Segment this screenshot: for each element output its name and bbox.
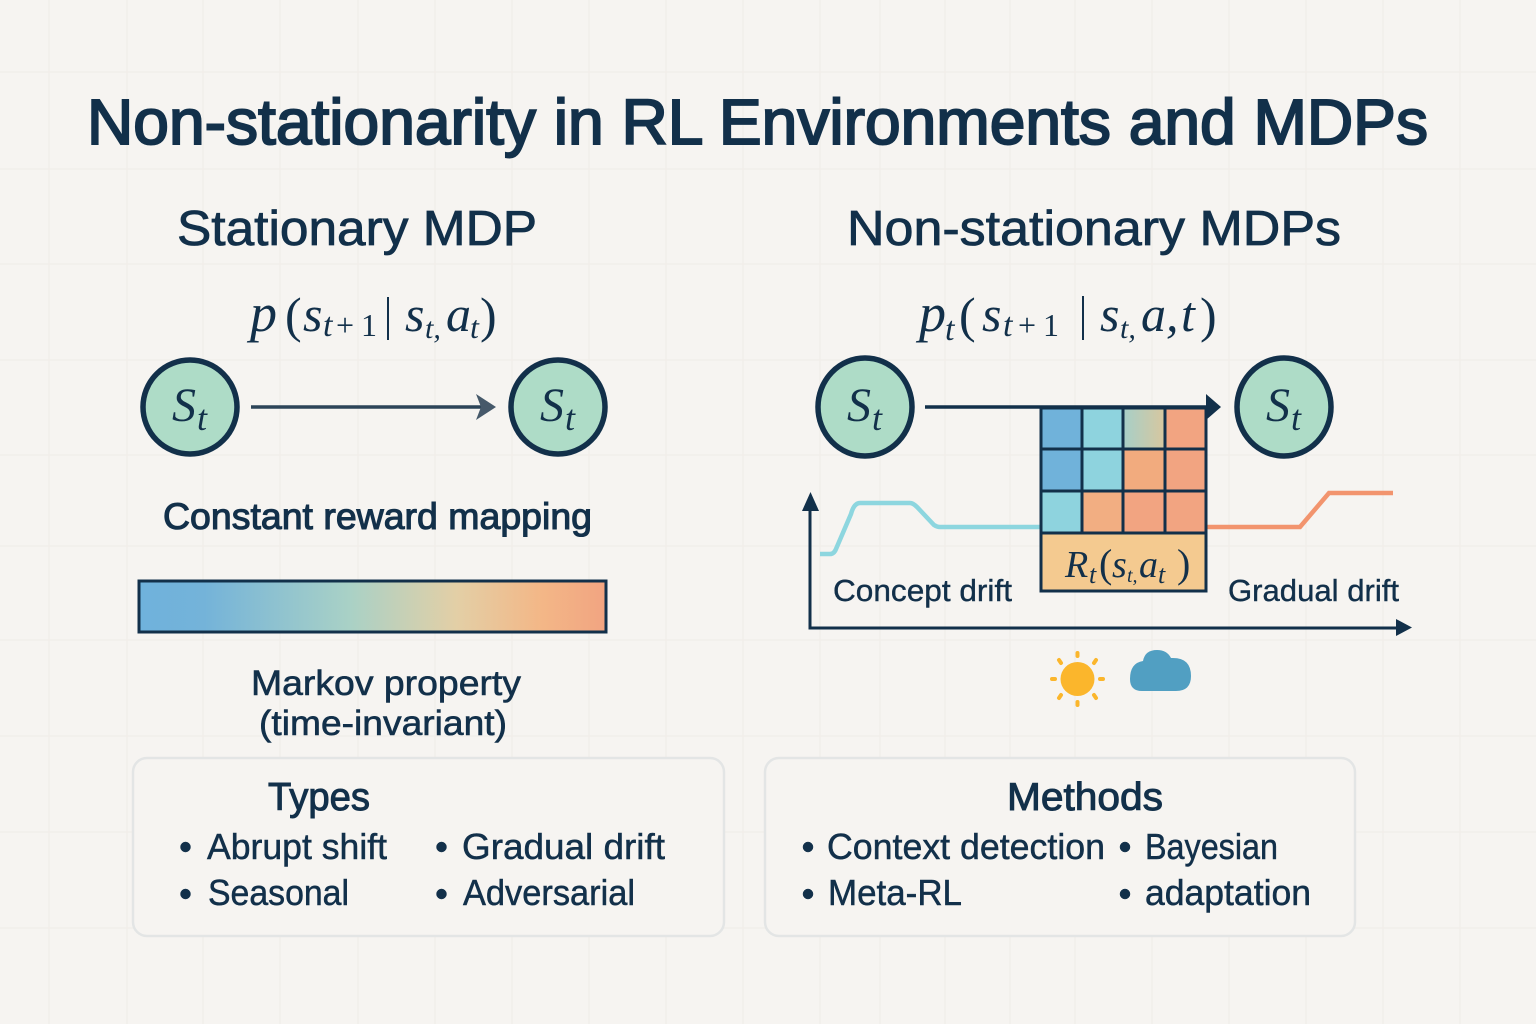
formula: reward function: t [1158, 560, 1166, 589]
list: types: Adversarial [463, 872, 635, 913]
label: gradual drift: Gradual drift [1228, 573, 1399, 608]
formula: reward function: t [1089, 560, 1097, 589]
heading: stationary MDP: Stationary MDP [177, 202, 537, 256]
formula: non-stationary transition: 1 [1043, 307, 1059, 343]
label: Markov property: (time-invariant) [259, 704, 507, 743]
heading: methods: Methods [1007, 776, 1163, 819]
list: types [180, 826, 665, 913]
state node: right: t [1291, 398, 1302, 438]
formula: stationary transition: t [470, 309, 480, 345]
state node: left: S [172, 379, 196, 432]
formula: non-stationary transition: ( [959, 287, 976, 343]
formula: reward function: ) [1177, 541, 1190, 586]
reward heatmap grid [1041, 408, 1206, 591]
gradient bar [139, 581, 606, 632]
icon: cloud [1130, 650, 1191, 691]
panel: non-stationary MDPs [802, 202, 1412, 705]
formula: reward function: R [1064, 544, 1088, 586]
formula: non-stationary transition: t [945, 311, 956, 348]
formula: stationary transition: t, [425, 312, 441, 345]
list: methods: Bayesian [1145, 826, 1278, 867]
icon: sun [1052, 653, 1103, 705]
list: methods: Meta-RL [828, 872, 962, 913]
label: Markov property: Markov property [251, 664, 522, 703]
formula: stationary transition: 1 [361, 307, 377, 343]
list: types: Gradual drift [462, 826, 665, 867]
formula: non-stationary transition: a, [1141, 286, 1178, 342]
formula: non-stationary transition: s [982, 286, 1001, 342]
title: Non-stationarity in RL Environments and MDPs [87, 86, 1428, 158]
formula: stationary transition: t [323, 307, 334, 344]
label: constant reward mapping: Constant reward mapping [163, 496, 592, 537]
formula: non-stationary transition: t, [1120, 312, 1136, 345]
state node: left [818, 358, 912, 456]
state node: left: t [197, 398, 208, 438]
formula: stationary transition [246, 283, 497, 345]
state node: left: S [847, 379, 871, 432]
heading: types: Types [268, 776, 370, 819]
arrow: stationary transition [251, 394, 496, 420]
gradual drift line [1206, 493, 1393, 527]
list: types: Abrupt shift [207, 826, 387, 867]
list: methods [803, 826, 1311, 913]
formula: stationary transition: a [446, 286, 471, 342]
panel: types [133, 758, 724, 936]
formula: non-stationary transition: p [915, 283, 946, 343]
formula: reward function: s [1112, 544, 1127, 586]
formula: non-stationary transition: t [1181, 286, 1196, 342]
heading: non-stationary MDPs: Non-stationary MDPs [847, 202, 1341, 256]
list: types: Seasonal [208, 872, 349, 913]
label: Markov property [251, 664, 522, 743]
list: methods: Context detection [827, 826, 1105, 867]
state node: right [1237, 358, 1331, 456]
formula: non-stationary transition: ) [1200, 287, 1217, 343]
formula: stationary transition: p [246, 283, 277, 343]
formula: stationary transition: + [336, 307, 354, 343]
formula: stationary transition: ( [285, 287, 302, 343]
arrow: non-stationary transition [925, 394, 1221, 420]
panel: stationary MDP [139, 202, 606, 743]
formula: reward function: a [1139, 544, 1158, 586]
formula: stationary transition: s [405, 286, 424, 342]
formula: non-stationary transition: t [1003, 307, 1014, 344]
formula: reward function: ( [1099, 541, 1112, 586]
label: concept drift: Concept drift [833, 573, 1012, 608]
formula: non-stationary transition: s [1100, 286, 1119, 342]
state node: right: S [1266, 379, 1290, 432]
list: methods: adaptation [1145, 872, 1311, 913]
drift chart axes [802, 492, 1412, 636]
formula: stationary transition: s [303, 286, 322, 342]
panel: methods [765, 758, 1355, 936]
state node: right [511, 360, 605, 454]
state node: left: t [872, 398, 883, 438]
formula: non-stationary transition: + [1018, 307, 1036, 343]
formula: stationary transition: ) [480, 287, 497, 343]
formula: reward function [1064, 541, 1190, 589]
state node: right: S [540, 379, 564, 432]
state node: right: t [565, 398, 576, 438]
state node: left [143, 360, 237, 454]
concept drift line [820, 503, 1042, 554]
formula: reward function: t, [1127, 565, 1138, 587]
formula: non-stationary transition [915, 283, 1217, 348]
